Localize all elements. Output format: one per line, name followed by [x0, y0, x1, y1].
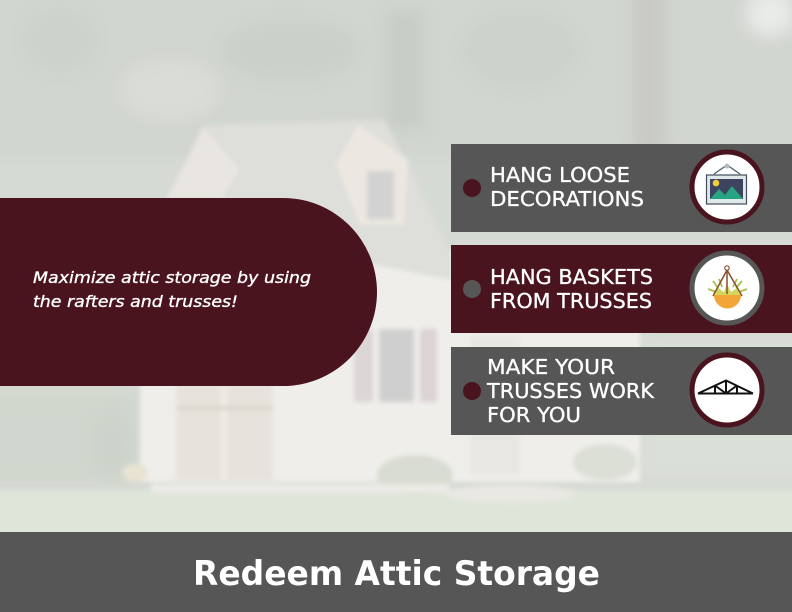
step 3 label: FOR YOU	[487, 403, 581, 427]
step 1 label: DECORATIONS	[490, 187, 644, 211]
step 3 label	[486, 355, 655, 427]
icon: hanging basket	[692, 253, 762, 323]
step 3: make your trusses work for you	[451, 347, 792, 435]
step 1 label: HANG LOOSE	[490, 163, 630, 187]
step 2 label: FROM TRUSSES	[490, 289, 652, 313]
shrubs and path	[377, 455, 453, 495]
dormer	[336, 125, 408, 225]
step 2 label	[490, 265, 653, 313]
step 2 label: HANG BASKETS	[490, 265, 653, 289]
title: Redeem Attic Storage	[193, 554, 600, 594]
callout text	[33, 268, 311, 311]
main roof	[165, 120, 452, 280]
doors	[176, 384, 273, 480]
callout panel	[0, 198, 377, 386]
main body	[140, 250, 640, 482]
window with shutters	[354, 329, 373, 402]
callout text: Maximize attic storage by using	[33, 268, 311, 287]
bullet dot	[463, 382, 481, 400]
step 1: hang loose decorations	[451, 144, 792, 232]
bullet dot	[463, 179, 481, 197]
footer bar	[0, 532, 792, 612]
step 2: hang baskets from trusses	[451, 245, 792, 333]
callout text: the rafters and trusses!	[33, 292, 238, 311]
icon: framed picture	[692, 152, 762, 222]
step 1 label	[490, 163, 644, 211]
step 3 label: MAKE YOUR	[487, 355, 615, 379]
icon: roof truss	[692, 355, 762, 425]
step 3 label: TRUSSES WORK	[486, 379, 655, 403]
bullet dot	[463, 280, 481, 298]
